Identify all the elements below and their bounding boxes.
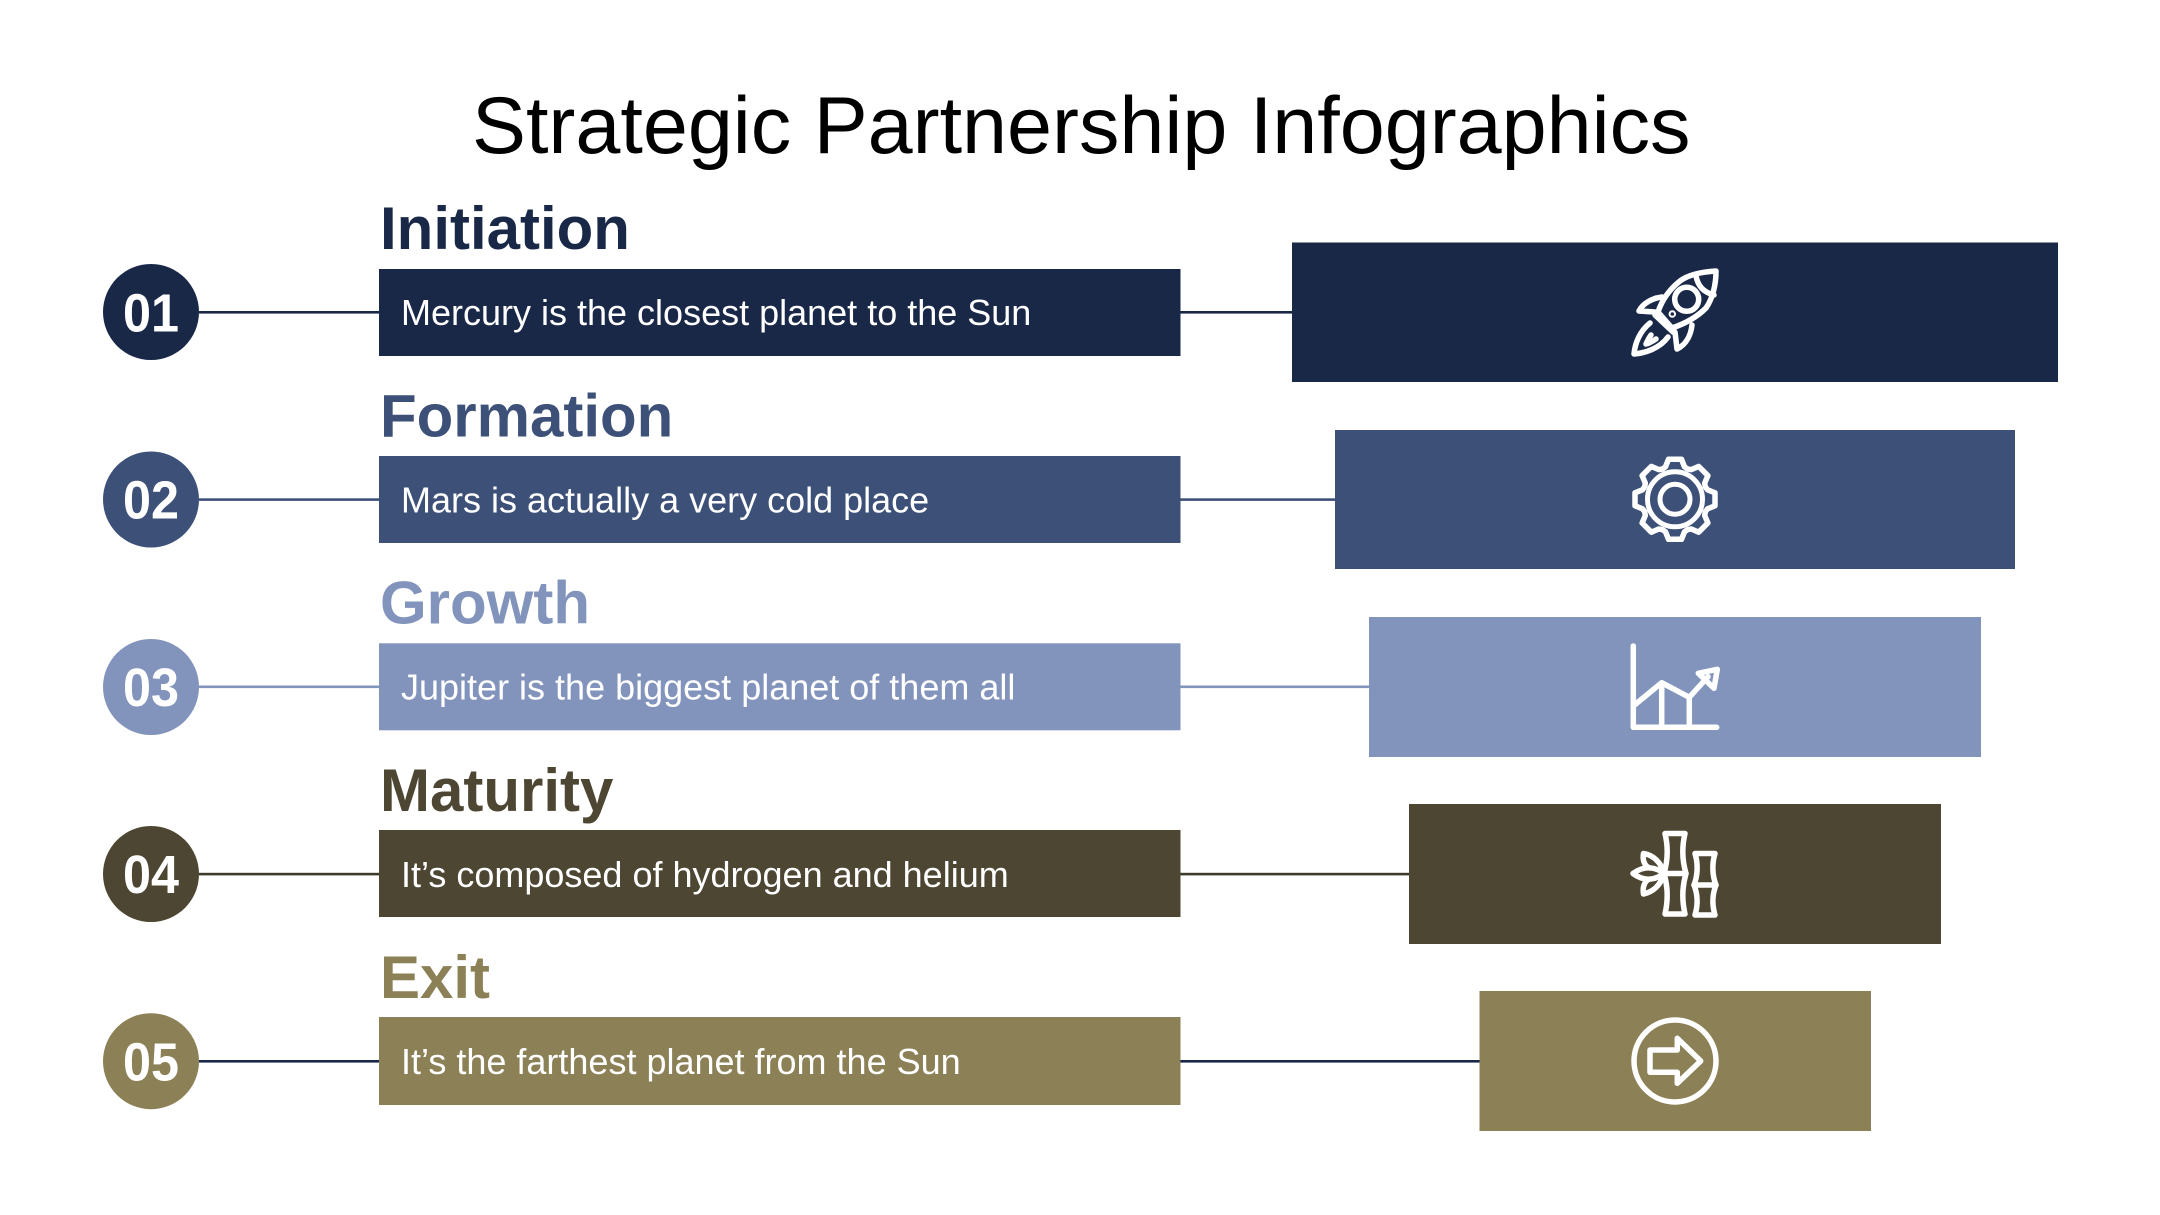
icon: rocket	[1634, 271, 1716, 354]
icon: gear	[1635, 459, 1715, 539]
icon panel 3	[1369, 617, 1981, 757]
description bar 1	[379, 269, 1180, 356]
heading: Maturity: Maturity	[380, 757, 614, 824]
number badge 02: 02	[123, 471, 179, 531]
icon: growth chart	[1633, 646, 1717, 727]
description bar 2: Mars is actually a very cold place	[401, 479, 929, 520]
title: Strategic Partnership Infographics	[472, 81, 1690, 171]
icon panel 4	[1409, 804, 1941, 944]
icon panel 2	[1335, 430, 2015, 569]
number badge 01: 01	[123, 283, 179, 343]
description bar 4	[379, 830, 1180, 917]
icon panel 5	[1480, 991, 1871, 1131]
description bar 3: Jupiter is the biggest planet of them all	[401, 667, 1015, 708]
icon: bamboo	[1633, 834, 1716, 915]
description bar 4: It’s composed of hydrogen and helium	[401, 854, 1009, 895]
description bar 2	[379, 456, 1180, 543]
icon panel 1	[1292, 242, 2058, 382]
number badge 03: 03	[123, 658, 179, 718]
number badge 02	[103, 452, 199, 548]
heading: Growth: Growth	[380, 570, 590, 637]
icon: arrow in circle	[1634, 1020, 1716, 1102]
row 5: Exit	[199, 1060, 379, 1063]
number badge 03	[103, 639, 199, 735]
heading: Initiation: Initiation	[380, 195, 630, 262]
number badge 04	[103, 826, 199, 922]
row 3: Growth	[199, 686, 379, 688]
number badge 04: 04	[123, 845, 179, 905]
heading: Exit: Exit	[380, 944, 490, 1011]
number badge 05: 05	[123, 1032, 179, 1092]
number badge 05	[103, 1013, 199, 1109]
heading: Formation: Formation	[380, 382, 673, 449]
row 1: Initiation	[103, 195, 2058, 1131]
description bar 5	[379, 1017, 1180, 1105]
description bar 1: Mercury is the closest planet to the Sun	[401, 292, 1031, 333]
row 4: Maturity	[199, 873, 379, 875]
number badge 01	[103, 264, 199, 360]
description bar 3	[379, 643, 1180, 730]
row 2: Formation	[199, 498, 379, 501]
description bar 5: It’s the farthest planet from the Sun	[401, 1041, 961, 1082]
